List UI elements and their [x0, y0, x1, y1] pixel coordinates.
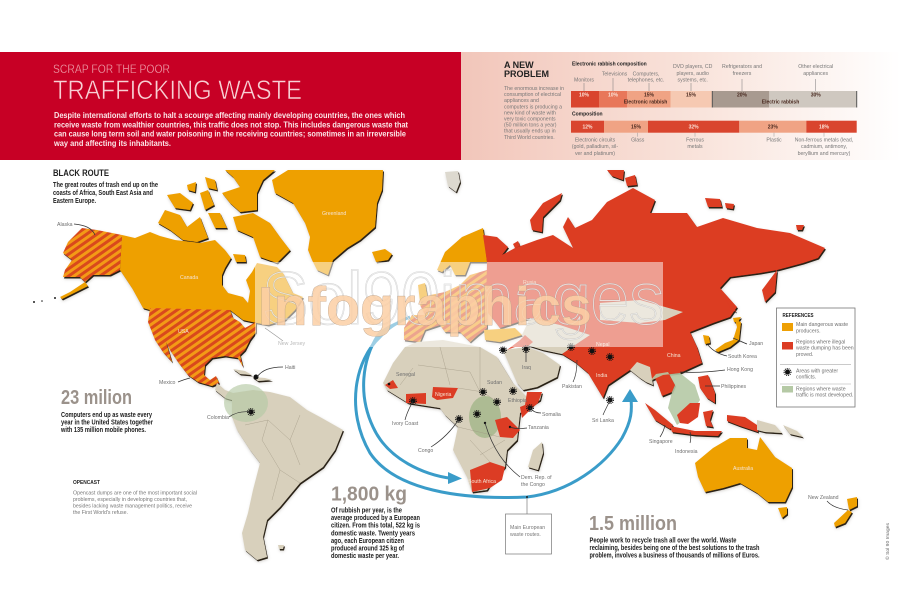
- legend: main producers: [782, 322, 848, 334]
- europe: [404, 270, 487, 342]
- japan and korea: [703, 317, 741, 352]
- stat: 23 milion: with 135 million mobile phones.: [60, 427, 146, 434]
- map labels: Mexico: [159, 380, 176, 386]
- intro text: way and affecting its inhabitants.: [53, 139, 171, 148]
- chart: composition: (gold, palladium, sil-: [572, 144, 618, 150]
- map labels: South Africa: [468, 479, 496, 485]
- chart: composition: 12%: [582, 124, 593, 130]
- stat: 23 milion: Computers end up as waste every: [61, 412, 152, 419]
- stat: 1,800 kg: domestic waste per year.: [331, 553, 399, 560]
- problem text: consumption of electrical: [504, 92, 561, 98]
- map labels: Pakistan: [562, 384, 582, 390]
- map labels: Dem. Rep. of: [521, 475, 552, 481]
- map labels: Singapore: [649, 439, 673, 445]
- chart: electronic rabbish composition: Electric rabbish: [762, 100, 799, 106]
- legend: most developed traffic: Regions where waste: [796, 386, 846, 392]
- text: opencast: the First World's refuse.: [73, 510, 128, 516]
- chart: composition: Non-ferrous metals (lead,: [795, 138, 853, 144]
- australia: [695, 437, 792, 502]
- map labels: Philippines: [721, 384, 746, 390]
- callout: main european waste routes: waste routes.: [510, 532, 541, 538]
- mongolia: [600, 300, 683, 323]
- aleutians: [60, 282, 88, 299]
- problem text: that usually ends up in: [504, 129, 556, 135]
- chart: composition: 18%: [819, 124, 830, 130]
- africa: [383, 340, 542, 492]
- legend: conflicts: conflicts.: [796, 374, 816, 380]
- world map: [33, 170, 857, 560]
- legend: conflicts: [784, 368, 838, 380]
- map labels: Sudan: [487, 380, 502, 386]
- chart: composition: ver and platinum): [575, 151, 615, 157]
- chart: electronic rabbish composition: 10%: [579, 92, 590, 98]
- text: opencast: [73, 480, 197, 516]
- legend: main producers: producers.: [796, 328, 821, 334]
- watermark: Rusia: [523, 280, 536, 286]
- russia and asia: [483, 188, 825, 398]
- watermark: Sol90images: [262, 257, 664, 340]
- stat: 1,800 kg: ago, each European citizen: [331, 538, 404, 545]
- map leader lines: [74, 224, 848, 510]
- chart: electronic rabbish composition: appliances: [803, 71, 829, 77]
- stat: 23 milion: 23 milion: [61, 387, 132, 409]
- heading: a new problem: A NEW: [504, 60, 534, 70]
- problem text: (50 million tons a year): [504, 123, 557, 129]
- map land masses: [60, 170, 857, 560]
- map labels: Japan: [749, 341, 763, 347]
- text: opencast: problems, especially in developing countries that,: [73, 497, 187, 503]
- chart: electronic rabbish composition: Electronic rabbish: [624, 100, 667, 106]
- chart: electronic rabbish composition: Televisions: [602, 72, 628, 78]
- chart: composition: metals: [687, 144, 703, 150]
- chart: electronic rabbish composition: freezers: [733, 71, 752, 77]
- intro text: [53, 111, 408, 148]
- map labels: the Congo: [521, 482, 545, 488]
- alaska: [63, 228, 122, 282]
- map labels: New Jersey: [278, 341, 306, 347]
- aleutian dots: [33, 297, 56, 303]
- chart: composition: Electronic circuits: [575, 138, 616, 144]
- problem text: very toxic components: [504, 116, 556, 122]
- stat: 23 milion: [60, 387, 153, 434]
- map labels: [57, 211, 839, 501]
- green zones: most developed waste traffic: [224, 372, 700, 438]
- new zealand: [847, 497, 857, 510]
- chart: electronic rabbish composition: DVD players, CD: [673, 64, 713, 70]
- map labels: Indonesia: [675, 449, 698, 455]
- chart: composition: 23%: [768, 124, 778, 130]
- text: opencast: besides lacking waste management politics, receive: [73, 504, 192, 510]
- map labels: Somalia: [542, 412, 561, 418]
- stat: 23 milion: year in the United States together: [61, 420, 153, 426]
- map labels: USA: [178, 329, 189, 335]
- text: opencast: OPENCAST: [73, 480, 101, 486]
- text: black route: The great routes of trash end up on the: [53, 182, 158, 189]
- legend: dumping proved: [782, 340, 854, 358]
- tasmania: [778, 507, 787, 518]
- countries where dumping is proved: [385, 335, 542, 492]
- usa and mexico: [148, 308, 256, 386]
- map labels: Canada: [180, 275, 198, 281]
- text: black route: BLACK ROUTE: [53, 168, 109, 178]
- problem text: new kind of waste with: [504, 110, 556, 116]
- chart: electronic rabbish composition: Refrigerators and: [722, 64, 762, 70]
- panel: a new problem: [461, 52, 901, 160]
- text: black route: [53, 168, 158, 205]
- stat: 1,800 kg: domestic waste. Twenty years: [331, 530, 415, 537]
- map labels: Ethiopia: [508, 398, 527, 404]
- chart: electronic rabbish composition: Electronic rabbish composition: [572, 62, 647, 68]
- map labels: Nigeria: [435, 392, 452, 398]
- chart: electronic rabbish composition: players, audio: [677, 71, 709, 77]
- chart: electronic rabbish composition: Other electrical: [798, 64, 833, 70]
- stat: 1,800 kg: Of rubbish per year, is the: [331, 508, 402, 514]
- problem text: The enormous increase in: [504, 86, 564, 92]
- heading: a new problem: PROBLEM: [504, 69, 549, 79]
- legend: most developed traffic: [782, 386, 853, 399]
- chart: electronic rabbish composition: telephones, etc.: [628, 78, 664, 84]
- canada: [120, 232, 303, 325]
- chart: composition: Glass: [631, 138, 645, 144]
- uk: [418, 283, 428, 302]
- chart: composition: [571, 112, 857, 157]
- chart: electronic rabbish composition: Monitors: [574, 78, 594, 84]
- map labels: Australia: [733, 466, 753, 472]
- intro text: can cause long term soil and water poisoning in the receiving countries; sometimes in an irreversible: [54, 130, 406, 139]
- chart: electronic rabbish composition: 30%: [811, 92, 821, 98]
- legend: dumping proved: proved.: [796, 352, 813, 358]
- greenland: [272, 170, 383, 275]
- arctic russia islands: [513, 170, 804, 312]
- chart: composition: beryllium and mercury): [798, 151, 851, 157]
- main european waste routes arrows: [356, 317, 638, 497]
- map labels: South Korea: [728, 354, 757, 360]
- svalbard: [445, 171, 460, 192]
- map labels: China: [667, 353, 681, 359]
- chart: composition: 15%: [631, 124, 642, 130]
- legend: most developed traffic: traffic is most developed.: [796, 393, 853, 399]
- conflict markers: [248, 344, 613, 428]
- map labels: Haiti: [285, 365, 295, 371]
- legend: references: [776, 308, 855, 407]
- chart: composition: 32%: [689, 124, 699, 130]
- legend: conflicts: Areas with greater: [796, 368, 838, 374]
- stat: 1.5 million: People work to recycle trash all over the world. Waste: [590, 538, 737, 544]
- map labels: Hong Kong: [727, 367, 753, 373]
- stat: 1.5 million: problem, involves a business of thousands of millions of Euros.: [590, 552, 760, 560]
- stat: 1.5 million: [589, 513, 760, 560]
- title: TRAFFICKING WASTE: [53, 75, 302, 105]
- middle east and central asia: [503, 347, 560, 390]
- chart: composition: cadmium, antimony,: [801, 144, 847, 150]
- stat: 1,800 kg: citizen. From this total, 522 kg is: [331, 523, 420, 530]
- map labels: Nepal: [596, 342, 610, 348]
- stat: 1,800 kg: 1,800 kg: [331, 484, 407, 506]
- map labels: India: [596, 373, 607, 379]
- intro text: receive waste from wealthier countries, this traffic does not stop. This includes dangerous waste that: [54, 120, 408, 129]
- text: black route: Eastern Europe.: [53, 198, 96, 205]
- stat: 1,800 kg: produced around 325 kg of: [331, 546, 405, 553]
- chart: electronic rabbish composition: Computers,: [633, 72, 659, 78]
- callout: main european waste routes: [506, 496, 552, 554]
- stat: 1.5 million: 1.5 million: [589, 513, 677, 535]
- falklands: [278, 545, 284, 549]
- problem text: computers is producing a: [504, 104, 562, 110]
- country borders: [245, 347, 505, 500]
- borneo: [677, 403, 700, 424]
- map labels: Sri Lanka: [592, 418, 614, 424]
- chart: electronic rabbish composition: systems, etc.: [678, 78, 708, 84]
- legend: dumping proved: waste dumping has been: [796, 346, 854, 352]
- header: red title panel: [0, 52, 461, 160]
- map labels: New Zealand: [808, 495, 839, 501]
- map labels: Congo: [418, 448, 433, 454]
- canadian arctic islands: [158, 170, 290, 263]
- map labels: Colombia: [207, 415, 229, 421]
- problem text: Third World countries.: [504, 135, 555, 141]
- chart: electronic rabbish composition: 20%: [737, 92, 748, 98]
- islands of southeast asia: [645, 375, 758, 436]
- map labels: Senegal: [396, 372, 415, 378]
- chart: composition: Composition: [572, 112, 603, 118]
- credit: © Sol 90 Images: [884, 522, 891, 560]
- legend: main producers: Main dangerous waste: [796, 322, 848, 328]
- stat: 1,800 kg: [331, 484, 420, 560]
- chart: composition: Ferrous: [686, 138, 704, 144]
- turkey: [484, 328, 522, 342]
- text: black route: coasts of Africa, South East Asia and: [53, 190, 153, 197]
- map labels: Greenland: [322, 211, 346, 217]
- iceland: [372, 249, 392, 262]
- stat: 1,800 kg: average produced by a European: [331, 515, 420, 522]
- watermark: Sol90images: [262, 257, 664, 340]
- map labels: Ivory Coast: [392, 421, 419, 427]
- problem text: appliances and: [504, 98, 539, 104]
- map labels: Tanzania: [528, 425, 549, 431]
- central and south america: [215, 383, 343, 560]
- stat: 1.5 million: reclaiming, besides being one of the best solutions to the trash: [590, 545, 760, 552]
- callout: main european waste routes: Main European: [510, 525, 545, 531]
- southeast asia mainland: [630, 362, 653, 385]
- legend: references: REFERENCES: [782, 313, 814, 319]
- chart: electronic rabbish composition: [571, 62, 857, 108]
- legend: dumping proved: Regions where illegal: [796, 340, 845, 346]
- chart: composition: Plastic: [766, 138, 782, 144]
- map labels: Alaska: [57, 222, 73, 228]
- text: opencast: Opencast dumps are one of the most important social: [73, 490, 197, 496]
- map labels: Iraq: [522, 365, 531, 371]
- chart: electronic rabbish composition: 15%: [644, 92, 655, 98]
- scandinavia: [437, 228, 487, 275]
- caribbean islands: [233, 369, 272, 381]
- watermark: Infographics: [258, 275, 592, 337]
- kicker: SCRAP FOR THE POOR: [53, 64, 170, 76]
- chart: electronic rabbish composition: 15%: [686, 92, 697, 98]
- intro text: Despite international efforts to halt a scourge affecting mainly developing countries, the ones which: [54, 111, 405, 120]
- madagascar: [528, 442, 543, 470]
- chart: electronic rabbish composition: 10%: [608, 92, 619, 98]
